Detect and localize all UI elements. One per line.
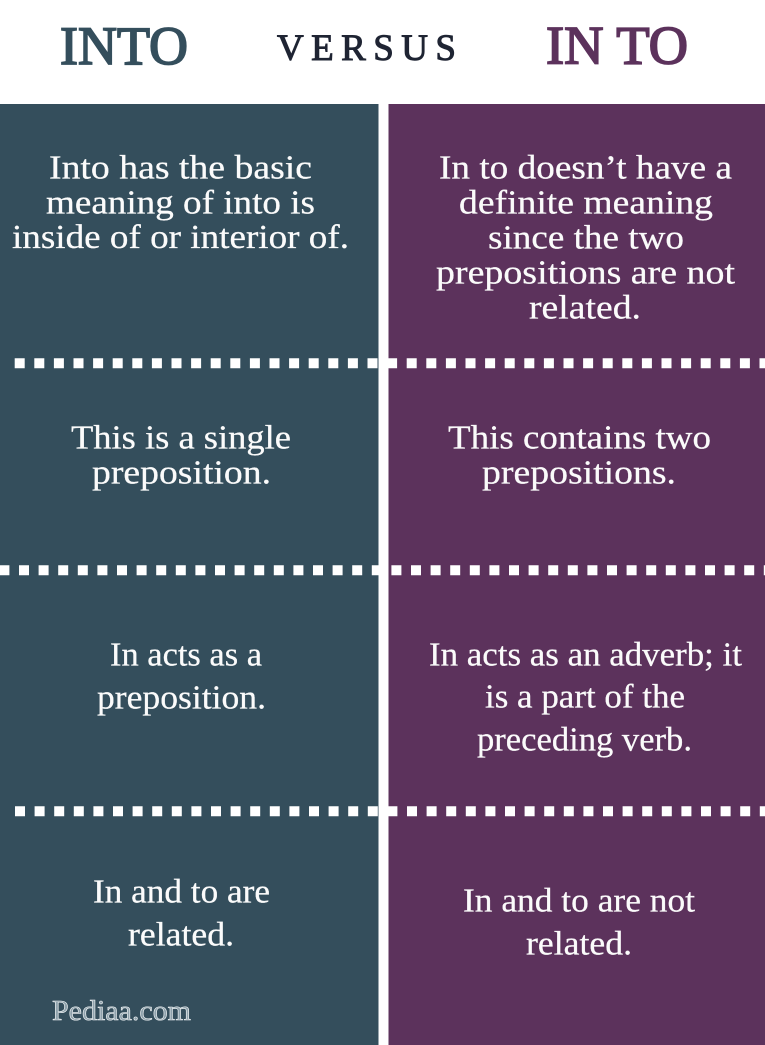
text: IN TO meaning: related. bbox=[529, 290, 641, 327]
text: IN TO role of in: is a part of the bbox=[485, 679, 685, 716]
text: INTO meaning: inside of or interior of. bbox=[12, 219, 349, 256]
text: INTO role of in: In acts as a bbox=[110, 637, 262, 674]
text: IN TO meaning: since the two bbox=[488, 220, 684, 257]
text: IN TO role of in: In acts as an adverb; it bbox=[429, 637, 743, 674]
heading: VERSUS: VERSUS bbox=[277, 28, 456, 69]
text: IN TO role of in: preceding verb. bbox=[477, 722, 692, 759]
text: INTO role of in bbox=[97, 637, 266, 717]
text: IN TO meaning: definite meaning bbox=[459, 185, 713, 222]
text: IN TO word type: This contains two bbox=[448, 420, 711, 457]
text: IN TO meaning: In to doesn’t have a bbox=[439, 150, 732, 187]
text: INTO relation bbox=[93, 874, 270, 954]
text: IN TO meaning bbox=[436, 150, 736, 327]
text: IN TO role of in bbox=[429, 637, 743, 759]
text: IN TO word type bbox=[448, 420, 711, 492]
text: INTO relation: In and to are bbox=[93, 874, 270, 911]
text: INTO relation: related. bbox=[128, 917, 234, 954]
text: INTO meaning: meaning of into is bbox=[46, 185, 315, 222]
text: INTO word type bbox=[71, 420, 291, 492]
text: IN TO relation: In and to are not bbox=[463, 883, 696, 920]
text: INTO role of in: preposition. bbox=[97, 680, 266, 717]
panel: INTO column bbox=[0, 104, 378, 1045]
row divider 2 bbox=[0, 565, 765, 575]
title: INTO: INTO bbox=[60, 16, 188, 76]
text: IN TO word type: prepositions. bbox=[482, 455, 676, 492]
text: INTO word type: preposition. bbox=[92, 455, 271, 492]
panel: IN TO column bbox=[388, 104, 765, 1045]
title: IN TO: IN TO bbox=[546, 16, 688, 76]
text: INTO meaning bbox=[12, 150, 349, 256]
text: INTO meaning: Into has the basic bbox=[49, 150, 312, 187]
row divider 3 bbox=[15, 806, 765, 816]
text: IN TO relation: related. bbox=[526, 926, 632, 963]
text: INTO word type: This is a single bbox=[71, 420, 291, 457]
text: IN TO meaning: prepositions are not bbox=[436, 255, 736, 292]
row divider 1 bbox=[15, 358, 765, 368]
logo: Pediaa.com: Pediaa.com bbox=[52, 995, 191, 1027]
text: IN TO relation bbox=[463, 883, 696, 963]
